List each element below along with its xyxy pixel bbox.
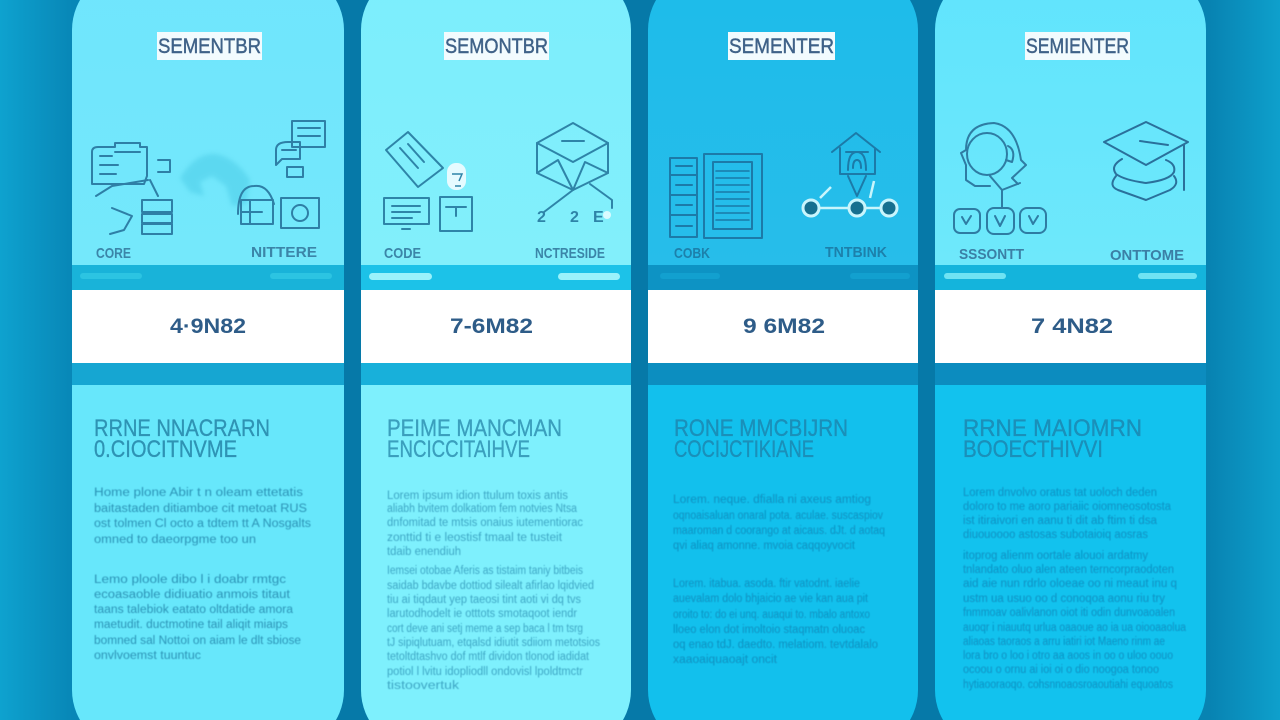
card 2 body text: tetoltdtashvo dof mtlf dividon tlonod iadidat	[387, 651, 590, 663]
card 3 body text: lloeo elon dot imoltoio staqmatn oluoac	[673, 624, 865, 636]
card 2 heading: ENCICCITAIHVE	[387, 436, 530, 463]
card 2 body text: cort deve ani setj meme a sep baca l tm tsrg	[387, 623, 583, 635]
card 4 lower panel	[935, 385, 1206, 720]
card 2 dot	[603, 211, 611, 219]
card 3 heading: COCIJCTIKIANE	[674, 436, 814, 463]
card 4 body text	[963, 487, 1187, 691]
card 2 body text: Iemsei otobae Aferis as tistaim taniy bitbeis	[387, 565, 583, 577]
card 3 body text: oroito to: do ei unq. auaqui to. mbalo antoxo	[673, 609, 870, 621]
card 2 heading: PEIME MANCMAN	[387, 415, 562, 442]
card 3 title: SEMENTER	[729, 35, 834, 58]
card 2 icon: open box	[537, 123, 612, 212]
card 4 upper panel	[935, 0, 1206, 265]
card 4 body text: diuouoooo astosas subotaioiq aosras	[963, 529, 1148, 541]
card 2 body text: tJ sipiqlutuam, etqalsd idiutit sdiiom metotsios	[387, 637, 600, 649]
card 3 left label: COBK	[674, 245, 710, 262]
card 4 heading: BOOECTHIVVI	[963, 436, 1103, 463]
card 2 upper panel	[361, 0, 631, 265]
card 3 lower band	[648, 363, 918, 385]
card 4 band	[935, 265, 1206, 290]
card 3 body text: Lorem. itabua. asoda. ftir vatodnt. iaelie	[673, 578, 860, 590]
card 3 value strip: 9 6M82	[743, 315, 825, 338]
card 2 lower band	[361, 363, 631, 385]
card 4 body text: fnmmoav oalivlanon oiot iti odin dunvoaoalen	[963, 607, 1175, 619]
card 2 title: SEMONTBR	[445, 35, 548, 58]
card 3 body text	[673, 494, 885, 666]
card 1 lower band	[72, 363, 344, 385]
card 4 body text: ustm ua usuo oo d conoqoa aonu riu try	[963, 593, 1165, 605]
card 2 icon digits: 2	[537, 209, 546, 226]
card 4 body text: tnlandato oluo alen ateen terncorpraodoten	[963, 564, 1174, 576]
card 2 left label: CODE	[384, 245, 421, 262]
card 4 icon: three tiles	[954, 208, 1046, 234]
card 2 body text: saidab bdavbe dottiod silealt afirlao lqidvied	[387, 580, 594, 592]
card 3 body text: xaaoaiquaoajt oncit	[673, 654, 778, 666]
card 2 body text: dnfomitad te mtsis onaius iutementiorac	[387, 517, 583, 529]
card 4 value strip	[935, 290, 1206, 363]
card 2 lower panel	[361, 385, 631, 720]
card 1 right label: NITTERE	[251, 244, 317, 261]
card 3 upper panel	[648, 0, 918, 265]
card 2 value strip: 7-6M82	[450, 315, 533, 338]
panel: card 1	[72, 0, 344, 720]
card 1 body text: ecoasaoble didiuatio anmois titaut	[94, 589, 291, 601]
card 4 body text: doloro to me aoro pariaiic oiomneosotosta	[963, 501, 1172, 513]
card 4 right label: ONTTOME	[1110, 247, 1184, 264]
card 3 body text: maaroman d coorango at aicaus. dJt. d aotaq	[673, 525, 885, 537]
card 3 band	[648, 265, 918, 290]
card 2 band	[361, 265, 631, 290]
card 2 body text	[387, 490, 600, 692]
card 1 body text: bomned sal Nottoi on aiam le dlt sbiose	[94, 635, 301, 647]
card 4 icon: headset person	[961, 123, 1026, 208]
card 2 body text: tiu ai tiqdaut yep taeosi tint aoti vi dq tvs	[387, 594, 581, 606]
card 4 body text: lora bro o loo i otro aa aoos in oo o uloo oouo	[963, 650, 1173, 662]
card 4 body text: ist itiraivori en aanu ti dit ab ftim ti dsa	[963, 515, 1158, 527]
card 1 left label: CORE	[96, 245, 131, 262]
card 3 body text: oqnoaisaluan onaral pota. aculae. suscaspiov	[673, 510, 883, 522]
card 4 heading	[963, 415, 1142, 463]
card 1 value strip: 4·9N82	[170, 315, 246, 338]
card 3 right label: TNTBINK	[825, 244, 887, 261]
card 2 body text: tdaib enendiuh	[387, 546, 461, 558]
card 2 white pill icon	[447, 163, 466, 190]
card 4 left label: SSSONTT	[959, 246, 1024, 263]
card 4 value strip: 7 4N82	[1031, 315, 1113, 338]
card 2 value strip	[361, 290, 631, 363]
card 1 value strip	[72, 290, 344, 363]
card 1 title: SEMENTBR	[158, 35, 261, 58]
card 1 body text	[94, 487, 311, 662]
card 3 icon: document panels	[670, 154, 762, 238]
card 2 body text: larutodhodelt ie otttots smotaqoot iendr	[387, 608, 577, 620]
card 4 body text: aid aie nun rdrlo oloeae oo ni meaut inu q	[963, 578, 1177, 590]
card 2 body text: potiol l lvitu idopliodll ondovisl lpoldtmctr	[387, 666, 583, 678]
card 4 body text: auoqr i niauutq urlua oaaoue ao ia ua oiooaaolua	[963, 622, 1187, 634]
card 2 icon digits: E	[593, 209, 604, 226]
card 1 heading: RRNE NNACRARN	[94, 415, 270, 442]
card 2 body text: tistoovertuk	[387, 680, 459, 692]
card 4 title: SEMIENTER	[1026, 35, 1129, 58]
card 2 body text: Lorem ipsum idion ttulum toxis antis	[387, 490, 568, 502]
card 4 lower band	[935, 363, 1206, 385]
card 4 body text: itoprog alienm oortale alouoi ardatmy	[963, 550, 1148, 562]
card 1 body text: maetudit. ductmotine tail aliqit miaips	[94, 619, 288, 631]
card 2 icon digits	[537, 209, 604, 226]
card 3 body text: auevalam dolo bhjaicio ae vie kan aua pit	[673, 593, 869, 605]
card 1 body text: Home plone Abir t n oleam ettetatis	[94, 487, 303, 499]
card 1 heading	[94, 415, 270, 463]
card 1 map blob	[180, 154, 250, 206]
card 1 body text: ost tolmen Cl octo a tdtem tt A Nosgalts	[94, 518, 311, 530]
card 3 body text: Lorem. neque. dfialla ni axeus amtiog	[673, 494, 871, 506]
card 4 body text: ocoou o ornu ai ioi oi o dio noogoa tonoo	[963, 664, 1159, 676]
card 4 body text: Lorem dnvolvo oratus tat uoloch deden	[963, 487, 1157, 499]
panel: card 2	[361, 0, 631, 720]
card 4 body text: hytiaooraoqo. cohsnnoaosroaoutiahi equoatos	[963, 679, 1173, 691]
card 3 body text: oq enao tdJ. daedto. melatiom. tevtdalalo	[673, 639, 878, 651]
card 2 icon digits: 2	[570, 209, 579, 226]
card 2 icon: devices	[384, 132, 472, 231]
panel: card 4	[935, 0, 1206, 720]
card 1 body text: taans talebiok eatato oltdatide amora	[94, 604, 294, 616]
card 1 icon: documents and network	[92, 121, 325, 234]
card 4 icon: graduation cap and books	[1104, 122, 1188, 200]
card 3 heading: RONE MMCBIJRN	[674, 415, 848, 442]
card 3 heading	[674, 415, 848, 463]
card 1 upper panel	[72, 0, 344, 265]
card 3 value strip	[648, 290, 918, 363]
card 1 body text: Lemo ploole dibo l i doabr rmtgc	[94, 574, 286, 586]
card 2 body text: zonttid ti e leostisf tmaal te tusteit	[387, 532, 563, 544]
card 1 body text: onvlvoemst tuuntuc	[94, 650, 201, 662]
card 4 heading: RRNE MAIOMRN	[963, 415, 1142, 442]
card 3 body text: qvi aliaq amonne. mvoia caqqoyvocit	[673, 540, 856, 552]
card 2 right label: NCTRESIDE	[535, 245, 605, 262]
card 2 body text: aliabh bvitem dolkatiom fem notvies Ntsa	[387, 503, 578, 515]
card 4 body text: aliaoas taoraos a arru iatiri iot Maeno rinm ae	[963, 636, 1165, 648]
card 1 body text: baitastaden ditiamboe cit metoat RUS	[94, 503, 307, 515]
card 3 icon: house and nodes	[803, 133, 897, 216]
card 1 band	[72, 265, 344, 290]
card 1 heading: 0.CIOCITNVME	[94, 436, 237, 463]
card 1 lower panel	[72, 385, 344, 720]
card 1 body text: omned to daeorpgme too un	[94, 534, 256, 546]
card 2 heading	[387, 415, 562, 463]
panel: card 3	[648, 0, 918, 720]
card 3 lower panel	[648, 385, 918, 720]
